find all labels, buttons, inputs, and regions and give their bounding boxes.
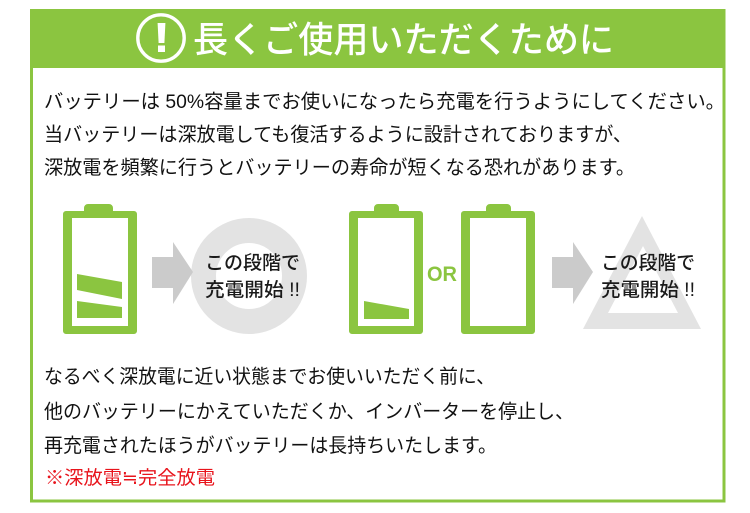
circle label: 充電開始 !! (205, 279, 300, 301)
text block: intro: 深放電を頻繁に行うとバッテリーの寿命が短くなる恐れがあります。 (44, 157, 635, 179)
text block: intro: 当バッテリーは深放電しても復活するように設計されておりますが、 (44, 124, 632, 146)
text block: intro (44, 91, 725, 179)
icon: battery with low charge (63, 204, 137, 334)
icon: empty battery (461, 204, 535, 334)
circle label (205, 252, 300, 301)
icon: exclamation circle (138, 15, 184, 61)
triangle mark (583, 216, 701, 329)
arrow (552, 242, 593, 304)
triangle label: この段階で (601, 252, 695, 274)
icon: battery nearly empty (349, 204, 423, 334)
text block: advice: 他のバッテリーにかえていただくか、インバーターを停止し、 (44, 401, 574, 423)
text block: advice: なるべく深放電に近い状態までお使いいただく前に、 (44, 366, 495, 388)
title: 長くご使用いただくために (193, 19, 614, 60)
triangle label: 充電開始 !! (601, 279, 695, 301)
header (30, 9, 725, 68)
circle mark (204, 230, 294, 322)
OR label: OR (427, 263, 457, 286)
note: red footnote: ※深放電≒完全放電 (45, 463, 215, 490)
text block: advice: 再充電されたほうがバッテリーは長持ちいたします。 (44, 435, 497, 457)
text block: advice (44, 366, 574, 457)
arrow (152, 242, 193, 304)
triangle label (601, 252, 695, 301)
circle label: この段階で (205, 252, 300, 274)
text block: intro: バッテリーは 50%容量までお使いになったら充電を行うようにしてください。 (44, 91, 725, 113)
